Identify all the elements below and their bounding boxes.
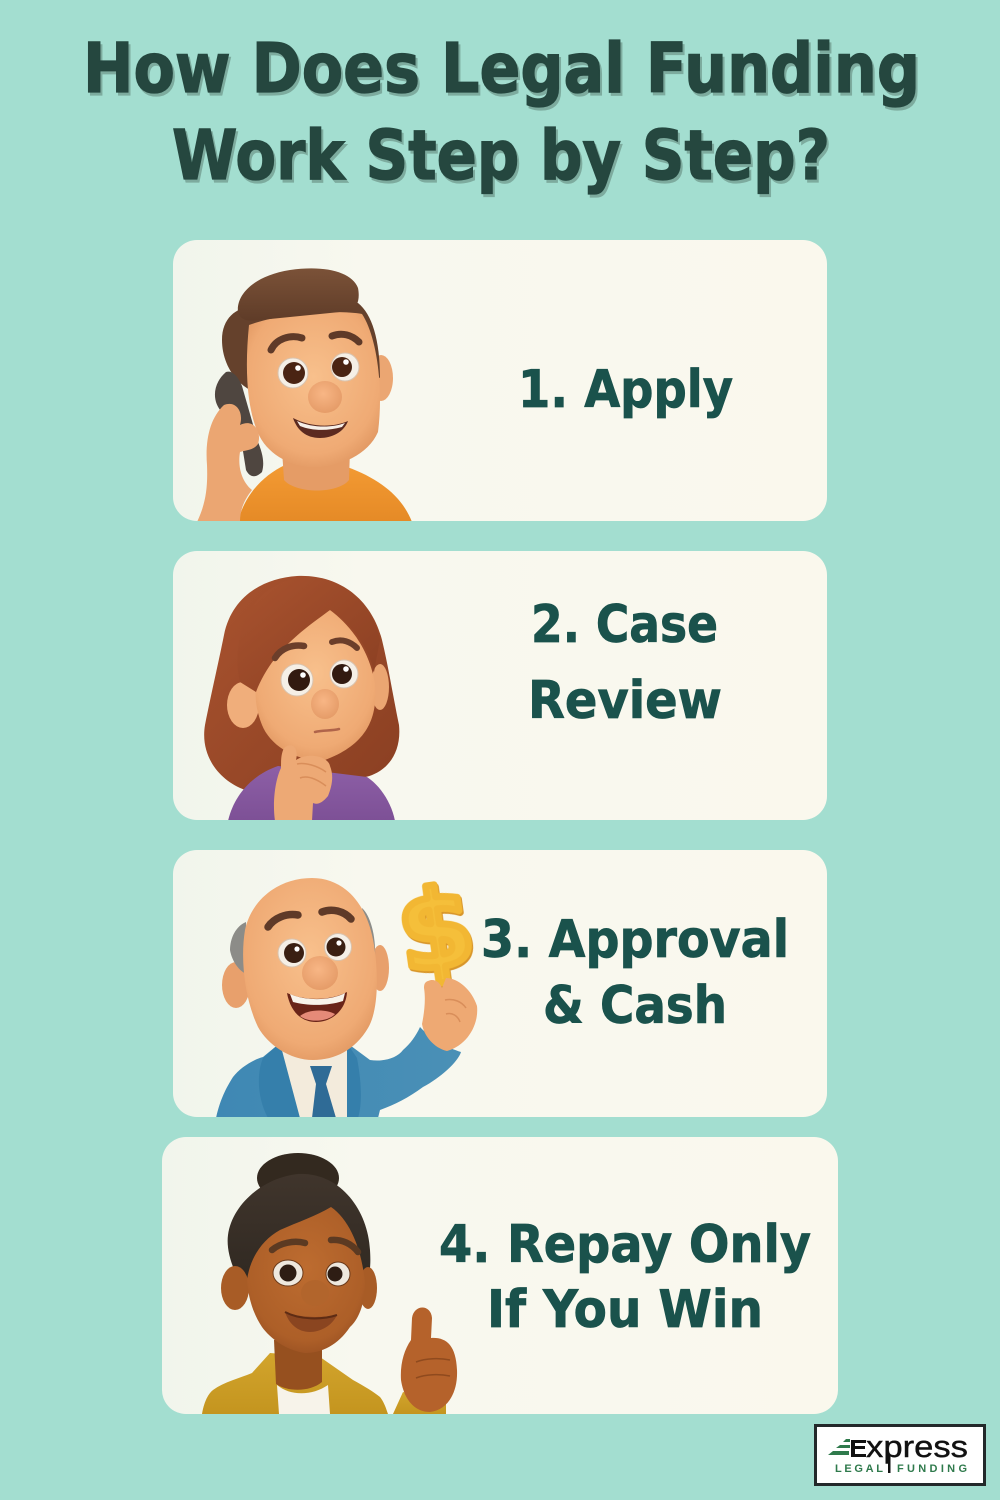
icon: dollar sign: $ xyxy=(390,863,482,998)
icon: face details xyxy=(268,910,352,1022)
icon: face details xyxy=(275,640,358,732)
title: Work Step by Step? xyxy=(172,116,830,196)
panel: step 2 case review xyxy=(173,551,827,821)
step label: 4. Repay Only xyxy=(439,1215,811,1275)
step label: 3. Approval xyxy=(481,910,789,970)
logo: express legal funding: xpress xyxy=(866,1429,968,1464)
logo: express legal funding xyxy=(816,1426,984,1484)
illustration: man holding dollar sign xyxy=(216,863,482,1118)
illustration: thinking woman xyxy=(204,576,399,821)
panel: step 3 approval and cash xyxy=(173,850,827,1118)
step label: Review xyxy=(528,671,722,731)
step label: 1. Apply xyxy=(518,360,733,420)
logo: express legal funding: LEGAL xyxy=(835,1463,883,1475)
title xyxy=(83,29,920,196)
step label xyxy=(439,1215,811,1340)
step label: & Cash xyxy=(543,976,727,1036)
step label xyxy=(481,910,789,1036)
icon: face details xyxy=(272,1240,358,1332)
illustration: woman with thumbs up xyxy=(202,1153,457,1414)
step label: If You Win xyxy=(487,1280,763,1340)
illustration: man on phone xyxy=(197,268,412,522)
panel: step 4 repay only if you win xyxy=(162,1137,838,1414)
step label xyxy=(528,595,722,731)
step label: 2. Case xyxy=(531,595,718,655)
logo: express legal funding: FUNDING xyxy=(897,1463,967,1475)
icon: face details xyxy=(271,334,359,438)
panel: step 1 apply xyxy=(173,240,827,522)
